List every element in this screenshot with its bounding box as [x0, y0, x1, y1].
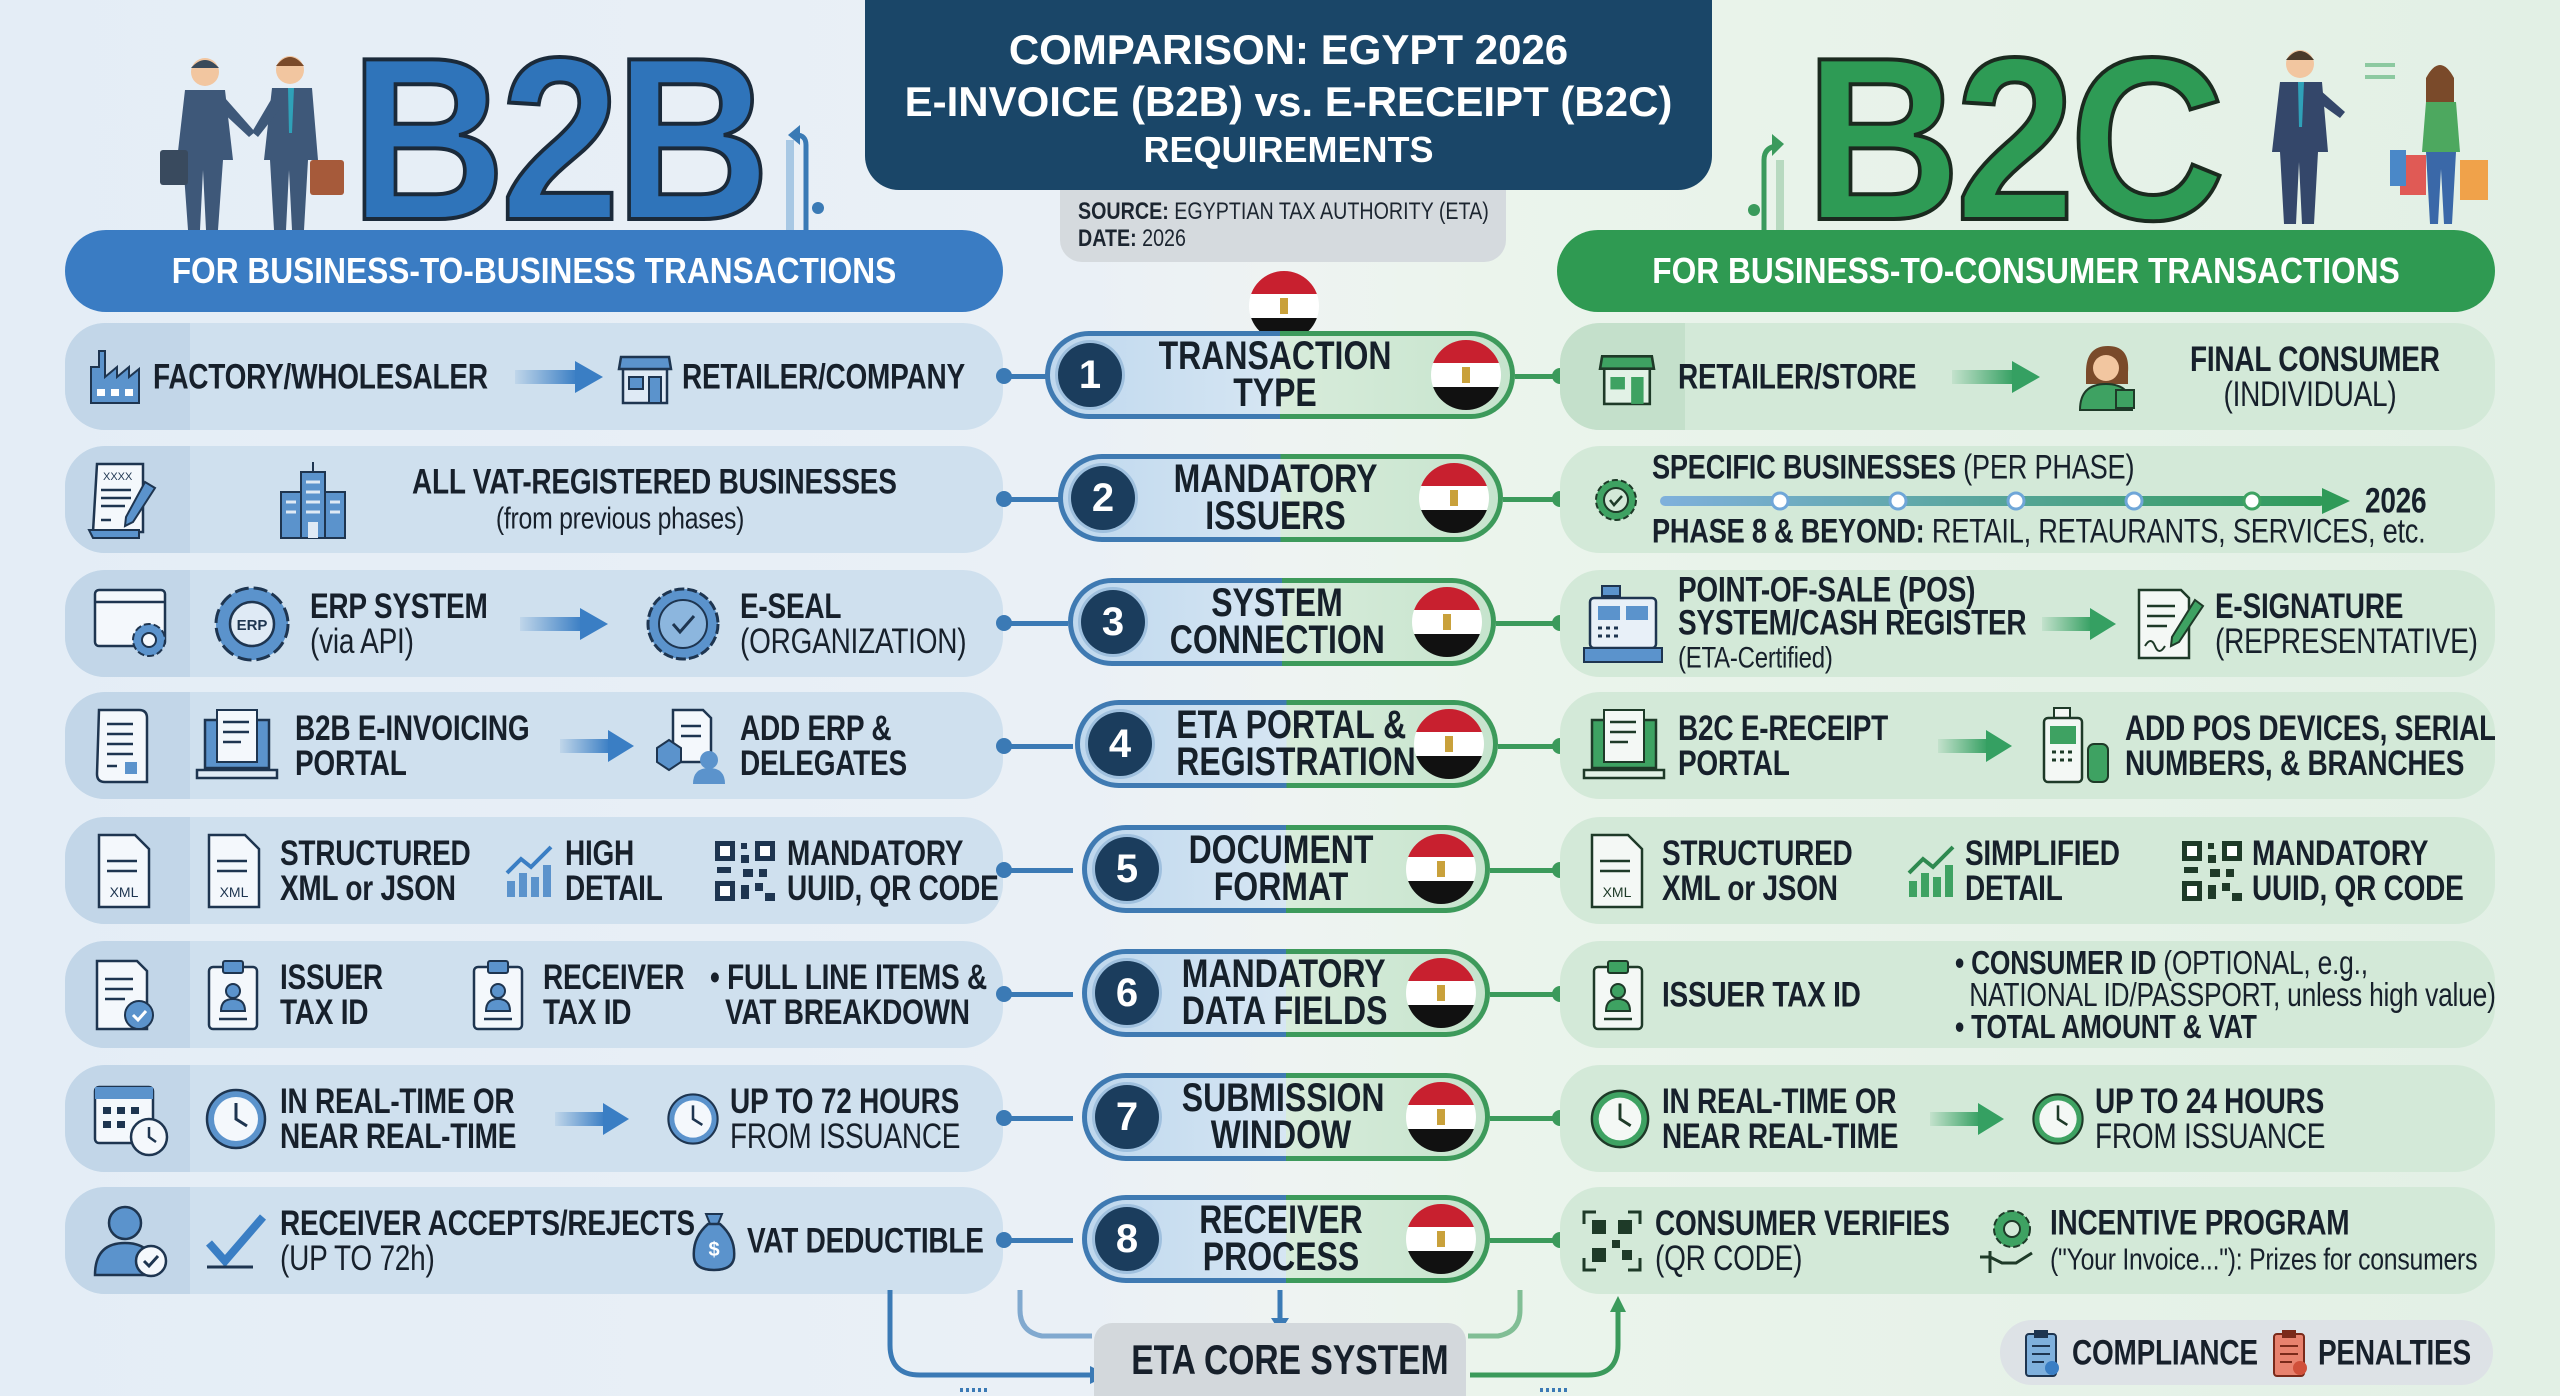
panel: B2C portal: PORTAL — [1678, 744, 1790, 782]
panel: B2B transaction type: FACTORY/WHOLESALER — [153, 357, 488, 396]
panel: B2B submission window: NEAR REAL-TIME — [280, 1116, 516, 1156]
panel: B2C receiver process: (QR CODE) — [1655, 1238, 1802, 1278]
icon: chart — [506, 846, 552, 897]
icon: receipt — [96, 708, 148, 784]
icon: window gear — [94, 588, 166, 657]
center pill 3: CONNECTION — [1170, 618, 1385, 662]
icon: money bag — [690, 1210, 738, 1272]
center pill 2 — [1058, 454, 1503, 542]
source box: SOURCE: EGYPTIAN TAX AUTHORITY (ETA) — [1078, 198, 1489, 225]
panel: B2C system connection: POINT-OF-SALE (POS) — [1678, 570, 1975, 609]
title — [865, 0, 1712, 190]
center pill 7: WINDOW — [1211, 1113, 1351, 1157]
icon: calendar clock — [94, 1086, 168, 1156]
panel: B2C document format: SIMPLIFIED — [1965, 834, 2120, 872]
center pill 6: DATA FIELDS — [1182, 989, 1387, 1033]
icon: clock — [206, 1088, 266, 1150]
icon: ID badge 2 — [472, 960, 524, 1030]
panel: B2C document format: STRUCTURED — [1662, 834, 1852, 872]
B2C heading illustration — [1748, 10, 2488, 269]
panel: B2C receiver process: ("Your Invoice..."): Prizes for consumers — [2050, 1241, 2477, 1276]
icon: xml file — [98, 834, 150, 908]
center pill 8 — [1082, 1195, 1490, 1283]
icon: cash register — [1583, 585, 1663, 663]
panel: B2B data fields: TAX ID — [543, 992, 631, 1032]
decorative flow: bottom connectors to ETA core — [880, 1290, 1700, 1396]
panel: B2C portal: NUMBERS, & BRANCHES — [2125, 744, 2464, 782]
icon: checklist — [96, 960, 154, 1030]
center pill 4 — [1075, 700, 1498, 788]
panel: B2C data fields — [1560, 941, 2495, 1048]
center pill 5: 5 — [1116, 847, 1138, 891]
panel: B2B submission window: FROM ISSUANCE — [730, 1116, 960, 1156]
panel: B2B mandatory issuers — [65, 446, 1003, 553]
icon: e-signature — [2138, 588, 2204, 660]
header: B2B — [65, 230, 1003, 312]
B2C letters: B2C — [1805, 10, 2220, 269]
icon: xml file 2: XML — [220, 884, 249, 900]
panel: B2B portal — [65, 692, 1003, 799]
title: COMPARISON: EGYPT 2026 — [1009, 26, 1568, 73]
panel: B2C mandatory issuers: 2026 — [2365, 482, 2426, 520]
panel: B2C portal — [1560, 692, 2495, 799]
center pill 8: RECEIVER — [1199, 1198, 1363, 1242]
panel: B2B document format: XML or JSON — [280, 868, 456, 908]
B2B heading illustration — [160, 10, 824, 269]
icon: store — [618, 356, 672, 404]
panel: B2C data fields: ISSUER TAX ID — [1662, 975, 1861, 1014]
panel: B2B document format: MANDATORY — [787, 834, 963, 872]
center pill 5 — [1082, 825, 1490, 913]
panel: B2C submission window: NEAR REAL-TIME — [1662, 1116, 1898, 1156]
icon: xml green — [1590, 834, 1644, 908]
center pill 4: 4 — [1109, 722, 1131, 766]
panel: B2C mandatory issuers: SPECIFIC BUSINESSES (PER PHASE) — [1652, 448, 2134, 486]
panel: B2B system connection: E-SEAL — [740, 586, 841, 626]
panel: B2C portal: B2C E-RECEIPT — [1678, 708, 1888, 748]
center pill 1: 1 — [1079, 353, 1101, 397]
icon: up arrow — [786, 125, 824, 230]
header: B2C — [1557, 230, 2495, 312]
icon: chart green — [1908, 846, 1954, 897]
title: E-INVOICE (B2B) vs. E-RECEIPT (B2C) — [905, 78, 1672, 125]
panel: B2B portal: PORTAL — [295, 744, 407, 782]
arrow — [515, 361, 603, 393]
icon: ID badge — [208, 960, 258, 1030]
center pill 8: PROCESS — [1203, 1235, 1359, 1279]
icon: clock small — [667, 1093, 719, 1145]
panel: B2B data fields: RECEIVER — [543, 958, 684, 996]
panel: B2C transaction type: FINAL CONSUMER — [2190, 340, 2440, 378]
ETA core system: ETA CORE SYSTEM — [1131, 1336, 1449, 1383]
source box — [1060, 190, 1506, 262]
center pill 1: TRANSACTION — [1159, 334, 1391, 378]
panel: B2C system connection: (REPRESENTATIVE) — [2215, 622, 2478, 660]
icon: xml file: XML — [110, 884, 139, 900]
center pill 3: 3 — [1102, 600, 1124, 644]
panel: B2B receiver process: (UP TO 72h) — [280, 1238, 435, 1278]
icon: laptop portal — [196, 709, 278, 780]
panel: B2C document format: UUID, QR CODE — [2252, 868, 2464, 908]
panel: B2B document format: STRUCTURED — [280, 834, 470, 872]
center pill 3: SYSTEM — [1211, 581, 1343, 625]
panel: B2C document format — [1560, 817, 2495, 924]
panel: B2B mandatory issuers: ALL VAT-REGISTERED BUSINESSES — [412, 462, 897, 501]
panel: B2C receiver process — [1560, 1187, 2495, 1294]
panel: B2B system connection: (via API) — [310, 622, 414, 660]
icon: document pen: XXXX — [103, 470, 133, 482]
icon: xml green: XML — [1603, 884, 1632, 900]
timeline — [1660, 488, 2350, 514]
panel: B2C receiver process: CONSUMER VERIFIES — [1655, 1204, 1950, 1242]
panel: B2C data fields: NATIONAL ID/PASSPORT, unless high value) — [1969, 976, 2495, 1012]
icon: compliance clipboard — [2024, 1328, 2062, 1378]
connector — [1003, 374, 1053, 379]
panel: B2B document format: UUID, QR CODE — [787, 868, 999, 908]
panel: B2C data fields: • TOTAL AMOUNT & VAT — [1955, 1008, 2257, 1044]
panel: B2B system connection — [65, 570, 1003, 677]
panel: B2B submission window: UP TO 72 HOURS — [730, 1082, 959, 1120]
panel: B2B transaction type: RETAILER/COMPANY — [682, 357, 965, 396]
center pill 6: 6 — [1116, 971, 1138, 1015]
panel: B2B document format — [65, 817, 1003, 924]
panel: B2C system connection — [1560, 570, 2495, 677]
icon: e-seal — [646, 588, 720, 660]
center pill 3 — [1068, 578, 1496, 666]
icon: incentive hand gear — [1978, 1206, 2042, 1274]
center pill 7: SUBMISSION — [1182, 1076, 1384, 1120]
panel: B2B data fields: • FULL LINE ITEMS & — [710, 958, 987, 996]
icon: clock green small — [2030, 1090, 2086, 1146]
panel: B2B data fields: VAT BREAKDOWN — [725, 992, 970, 1032]
panel: B2B portal: DELEGATES — [740, 744, 907, 782]
icon: POS device — [2042, 707, 2109, 784]
center pill 7: 7 — [1116, 1095, 1138, 1139]
icon: growth arrow — [1748, 134, 1784, 230]
panel: B2C system connection: SYSTEM/CASH REGISTER — [1678, 603, 2026, 642]
icon: businessmen handshake — [160, 56, 344, 230]
center pill 6: MANDATORY — [1182, 952, 1386, 996]
panel: B2C data fields: • CONSUMER ID (OPTIONAL, e.g., — [1955, 944, 2368, 980]
panel: B2B mandatory issuers: (from previous phases) — [496, 500, 744, 535]
panel: B2B submission window — [65, 1065, 1003, 1172]
legend: compliance / penalties: COMPLIANCE — [2072, 1333, 2258, 1372]
icon: person check — [91, 1200, 171, 1280]
panel: B2B transaction type — [65, 323, 1003, 430]
icon: businessman and shopper — [2272, 50, 2488, 224]
center pill 2: ISSUERS — [1205, 494, 1346, 538]
panel: B2B data fields: TAX ID — [280, 992, 368, 1032]
panel: B2B system connection: (ORGANIZATION) — [740, 622, 966, 660]
B2B letters: B2B — [350, 10, 765, 269]
panel: B2C system connection: E-SIGNATURE — [2215, 586, 2403, 626]
panel: B2C submission window: FROM ISSUANCE — [2095, 1116, 2325, 1156]
top flag — [1249, 271, 1319, 331]
center pill 8: 8 — [1116, 1217, 1138, 1261]
center pill 1: TYPE — [1233, 371, 1317, 415]
icon: QR green — [2182, 841, 2242, 901]
center pill 4: ETA PORTAL & — [1176, 703, 1406, 747]
panel: B2C receiver process: INCENTIVE PROGRAM — [2050, 1203, 2349, 1242]
panel: B2C submission window — [1560, 1065, 2495, 1172]
icon: office building — [280, 462, 346, 539]
icon: ERP gear: ERP — [237, 616, 267, 634]
panel: B2B document format: HIGH — [565, 834, 634, 872]
icon: laptop green — [1582, 709, 1666, 780]
icon: ID badge green — [1592, 960, 1644, 1030]
icon: document pen — [87, 462, 156, 539]
icon: xml file 2 — [208, 834, 260, 908]
icon: checkmark — [205, 1210, 267, 1270]
legend: compliance / penalties — [2000, 1320, 2493, 1385]
icon: penalties clipboard — [2272, 1328, 2310, 1378]
panel: B2C document format: MANDATORY — [2252, 834, 2428, 872]
icon: ERP gear — [214, 586, 290, 662]
panel: B2B document format: DETAIL — [565, 868, 663, 908]
panel: B2C transaction type: RETAILER/STORE — [1678, 357, 1916, 396]
ETA core system — [1094, 1323, 1466, 1396]
icon: factory — [90, 350, 140, 404]
panel: B2C transaction type — [1560, 323, 2495, 430]
icon: clock green — [1590, 1090, 1650, 1148]
panel: B2C portal: ADD POS DEVICES, SERIAL — [2125, 708, 2495, 748]
panel: B2B data fields — [65, 941, 1003, 1048]
source box: DATE: 2026 — [1078, 225, 1186, 252]
panel: B2B submission window: IN REAL-TIME OR — [280, 1082, 514, 1120]
center pill 2: MANDATORY — [1174, 457, 1377, 501]
title: REQUIREMENTS — [1143, 129, 1434, 170]
panel: B2C document format: XML or JSON — [1662, 868, 1838, 908]
panel: B2B receiver process: RECEIVER ACCEPTS/REJECTS — [280, 1204, 695, 1242]
panel: B2C submission window: UP TO 24 HOURS — [2095, 1082, 2324, 1120]
center pill 7 — [1082, 1073, 1490, 1161]
icon: consumer woman — [2079, 346, 2135, 411]
header: B2C: FOR BUSINESS-TO-CONSUMER TRANSACTIONS — [1652, 250, 2400, 291]
center pill 2: 2 — [1092, 476, 1114, 520]
panel: B2C transaction type: (INDIVIDUAL) — [2224, 374, 2396, 414]
icon: money bag: $ — [708, 1238, 720, 1260]
panel: B2C submission window: IN REAL-TIME OR — [1662, 1082, 1896, 1120]
center pill 4: REGISTRATION — [1176, 740, 1416, 784]
panel: B2C mandatory issuers — [1560, 446, 2495, 553]
panel: B2B system connection: ERP SYSTEM — [310, 586, 488, 626]
icon: store green — [1598, 355, 1656, 406]
header: B2B: FOR BUSINESS-TO-BUSINESS TRANSACTIONS — [172, 250, 896, 291]
panel: B2B receiver process — [65, 1187, 1003, 1294]
panel: B2B portal: B2B E-INVOICING — [295, 708, 529, 748]
panel: B2C mandatory issuers: PHASE 8 & BEYOND: RETAIL, RETAURANTS, SERVICES, etc. — [1652, 512, 2425, 550]
panel: B2B data fields: ISSUER — [280, 958, 383, 996]
panel: B2B portal: ADD ERP & — [740, 708, 891, 748]
panel: B2C document format: DETAIL — [1965, 868, 2063, 908]
center pill 1 — [1045, 331, 1515, 419]
legend: compliance / penalties: PENALTIES — [2318, 1333, 2471, 1372]
center pill 5: FORMAT — [1214, 865, 1348, 909]
panel: B2B receiver process: VAT DEDUCTIBLE — [747, 1221, 984, 1260]
center pill 6 — [1082, 949, 1490, 1037]
center pill 5: DOCUMENT — [1189, 828, 1373, 872]
icon: doc delegates — [656, 708, 725, 784]
panel: B2C system connection: (ETA-Certified) — [1678, 641, 1833, 674]
icon: gear check — [1595, 479, 1637, 521]
icon: QR code — [715, 841, 775, 901]
icon: QR scan — [1582, 1210, 1642, 1272]
